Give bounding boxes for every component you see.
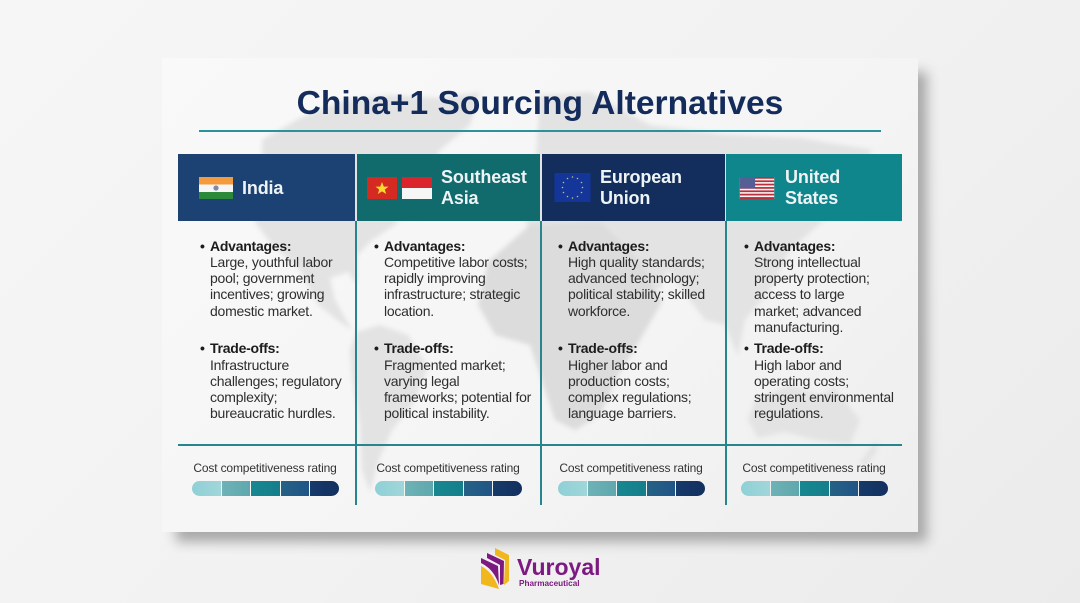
rating: European Union	[558, 461, 705, 496]
text: Southeast Asia advantages and trade-offs	[374, 238, 532, 421]
text: European Union advantages and trade-offs: Advantages:	[568, 238, 649, 254]
header: India	[178, 154, 354, 221]
text: European Union advantages and trade-offs: production costs;	[568, 373, 670, 389]
icon: India flag	[199, 177, 233, 199]
column dividers	[355, 221, 356, 505]
text: India advantages and trade-offs: challenges; regulatory	[210, 373, 341, 389]
icon: EU flag	[554, 173, 590, 202]
brand tagline: Pharmaceutical	[519, 579, 580, 588]
title underline	[199, 130, 881, 132]
text: United States advantages and trade-offs: access to large	[754, 286, 844, 302]
text: Southeast Asia advantages and trade-offs: Fragmented market;	[384, 356, 506, 372]
rating: European Union: Cost competitiveness rating	[559, 461, 703, 475]
text: European Union advantages and trade-offs: Trade-offs:	[568, 340, 638, 356]
text: European Union advantages and trade-offs: Higher labor and	[568, 356, 668, 372]
eurasia	[522, 92, 872, 356]
text: United States advantages and trade-offs: High labor and	[754, 356, 842, 372]
text: India advantages and trade-offs: incentives; growing	[210, 286, 324, 302]
text: United States advantages and trade-offs: stringent environmental	[754, 389, 894, 405]
text: Southeast Asia advantages and trade-offs: location.	[384, 303, 434, 319]
africa	[478, 222, 662, 430]
text: European Union advantages and trade-offs: complex regulations;	[568, 389, 691, 405]
text: European Union advantages and trade-offs: language barriers.	[568, 405, 676, 421]
header: India: India	[242, 178, 283, 198]
header: Southeast Asia	[356, 154, 540, 221]
header: European Union	[542, 154, 724, 221]
text: Southeast Asia advantages and trade-offs: •	[374, 340, 379, 356]
text: United States advantages and trade-offs: property protection;	[754, 270, 870, 286]
rating: India	[192, 461, 339, 496]
text: Southeast Asia advantages and trade-offs: political instability.	[384, 405, 490, 421]
text: United States advantages and trade-offs: regulations.	[754, 405, 823, 421]
header: Southeast Asia: Asia	[441, 188, 478, 208]
text: European Union advantages and trade-offs: •	[558, 340, 563, 356]
text: United States advantages and trade-offs: •	[744, 340, 749, 356]
text: Southeast Asia advantages and trade-offs: Advantages:	[384, 238, 465, 254]
text: United States advantages and trade-offs: Strong intellectual	[754, 254, 861, 270]
card shadow	[176, 72, 927, 542]
south america	[350, 325, 428, 492]
text: India advantages and trade-offs: Advantages:	[210, 238, 291, 254]
new zealand	[860, 440, 878, 466]
north america	[255, 92, 480, 330]
header: European Union: Union	[600, 188, 650, 208]
text: Southeast Asia advantages and trade-offs: Competitive labor costs;	[384, 254, 527, 270]
text: United States advantages and trade-offs: manufacturing.	[754, 319, 843, 335]
text: India advantages and trade-offs: complexity;	[210, 389, 277, 405]
text: United States advantages and trade-offs	[744, 238, 894, 421]
header: United States: United	[785, 167, 840, 187]
text: India advantages and trade-offs: Trade-offs:	[210, 340, 280, 356]
header: Southeast Asia: Southeast	[441, 167, 527, 187]
text: European Union advantages and trade-offs: political stability; skilled	[568, 286, 705, 302]
text: European Union advantages and trade-offs: workforce.	[568, 303, 630, 319]
header: United States: States	[785, 188, 838, 208]
rating: United States: Cost competitiveness rating	[742, 461, 886, 475]
text: United States advantages and trade-offs: operating costs;	[754, 373, 849, 389]
text: India advantages and trade-offs	[200, 238, 342, 421]
rating: India: Cost competitiveness rating	[193, 461, 337, 475]
text: European Union advantages and trade-offs: advanced technology;	[568, 270, 699, 286]
world map watermark	[255, 92, 876, 488]
text: European Union advantages and trade-offs: •	[558, 238, 563, 254]
text: European Union advantages and trade-offs: High quality standards;	[568, 254, 705, 270]
text: India advantages and trade-offs: pool; government	[210, 270, 314, 286]
text: European Union advantages and trade-offs	[558, 238, 705, 421]
icon: Vietnam and Indonesia flags	[367, 177, 432, 199]
panel: main card	[162, 58, 918, 532]
text: United States advantages and trade-offs: Advantages:	[754, 238, 835, 254]
text: India advantages and trade-offs: bureaucratic hurdles.	[210, 405, 336, 421]
text: India advantages and trade-offs: Large, youthful labor	[210, 254, 332, 270]
logo: Vuroyal Pharmaceutical	[481, 548, 601, 589]
rating: Southeast Asia: Cost competitiveness rating	[376, 461, 520, 475]
rating: United States	[741, 461, 888, 496]
australia	[748, 385, 860, 445]
text: India advantages and trade-offs: Infrastructure	[210, 356, 289, 372]
text: Southeast Asia advantages and trade-offs: infrastructure; strategic	[384, 286, 520, 302]
text: Southeast Asia advantages and trade-offs: •	[374, 238, 379, 254]
brand name: Vuroyal	[517, 554, 601, 580]
header: European Union: European	[600, 167, 682, 187]
icon: Vuroyal mark	[481, 548, 509, 589]
text: Southeast Asia advantages and trade-offs: frameworks; potential for	[384, 389, 531, 405]
rating: Southeast Asia	[375, 461, 522, 496]
text: Southeast Asia advantages and trade-offs: varying legal	[384, 373, 459, 389]
text: Southeast Asia advantages and trade-offs: Trade-offs:	[384, 340, 454, 356]
text: United States advantages and trade-offs: Trade-offs:	[754, 340, 824, 356]
text: India advantages and trade-offs: domestic market.	[210, 303, 313, 319]
text: Southeast Asia advantages and trade-offs: rapidly improving	[384, 270, 486, 286]
text: India advantages and trade-offs: •	[200, 340, 205, 356]
icon: US flag	[740, 177, 774, 199]
header: United States	[726, 154, 902, 221]
text: United States advantages and trade-offs: market; advanced	[754, 303, 861, 319]
text: United States advantages and trade-offs: •	[744, 238, 749, 254]
title: China+1 Sourcing Alternatives	[297, 85, 783, 122]
text: India advantages and trade-offs: •	[200, 238, 205, 254]
